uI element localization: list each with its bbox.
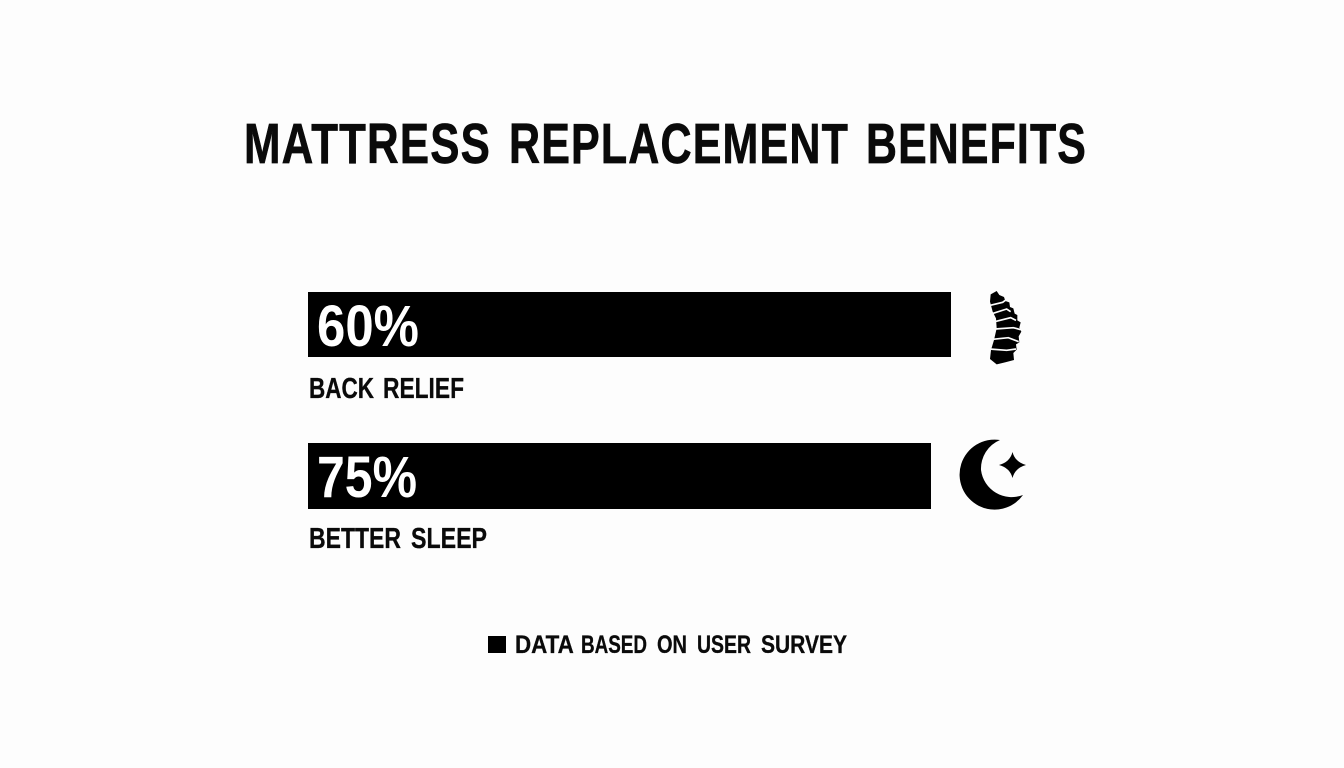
legend text: ON xyxy=(657,631,687,659)
panel: back relief row xyxy=(308,291,1021,405)
bar label: back relief: BACK xyxy=(309,373,374,405)
title: BENEFITS xyxy=(866,112,1087,176)
legend note xyxy=(488,631,847,659)
legend swatch xyxy=(488,636,506,653)
icon: spine xyxy=(989,291,1021,364)
legend text: DATA xyxy=(515,631,574,659)
title: REPLACEMENT xyxy=(509,112,849,176)
bar label: back relief: RELIEF xyxy=(383,373,464,405)
bar value: 75%: 75% xyxy=(317,445,417,510)
legend text: USER xyxy=(697,631,751,659)
panel: better sleep row xyxy=(308,440,1026,555)
icon: crescent moon and star xyxy=(960,440,1026,510)
bar label: better sleep: BETTER xyxy=(309,523,401,555)
bar: back relief 60% xyxy=(308,292,951,357)
title: MATTRESS xyxy=(244,112,491,176)
legend text: SURVEY xyxy=(761,631,847,659)
bar value: 60%: 60% xyxy=(317,294,419,359)
bar label: better sleep: SLEEP xyxy=(411,523,487,555)
legend text: BASED xyxy=(581,631,647,659)
bar: better sleep 75% xyxy=(308,443,931,509)
